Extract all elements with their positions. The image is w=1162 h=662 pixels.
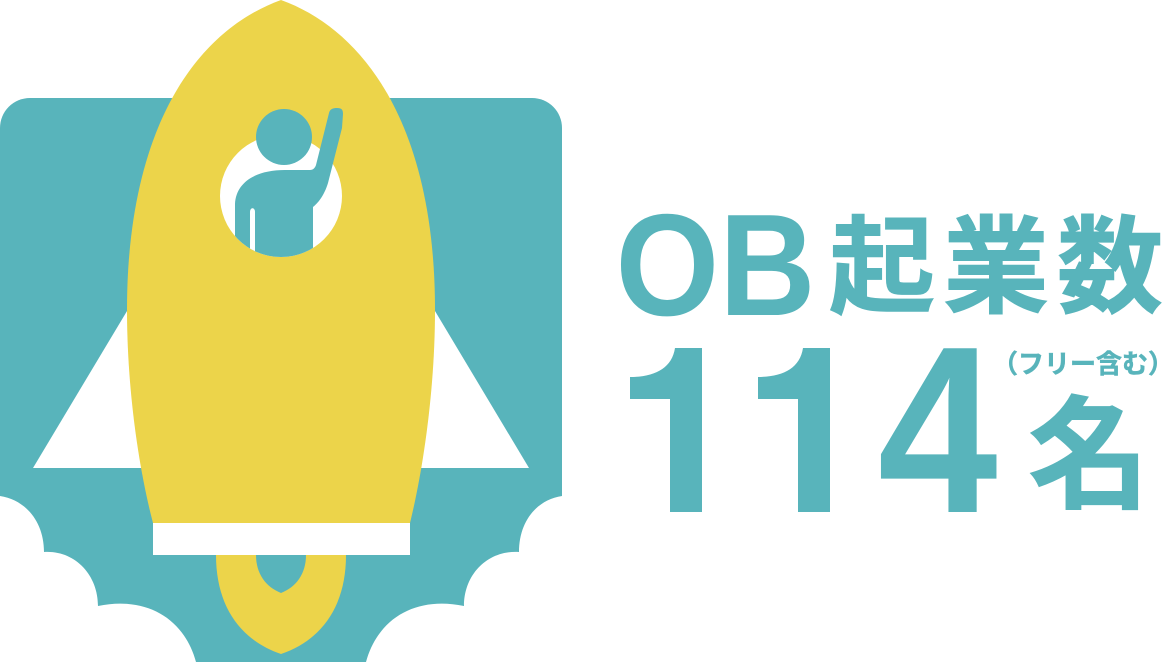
right white fin [412, 306, 529, 468]
heading: OB起業数: OB [616, 184, 816, 346]
icon: person raising arm [235, 108, 343, 262]
rocket body [127, 0, 435, 523]
left white fin [33, 306, 150, 468]
number: 114: 1 [756, 298, 888, 563]
teal rounded background panel [0, 98, 562, 662]
right cloud [366, 496, 562, 662]
flame [216, 555, 346, 654]
number: 114: 4 [878, 297, 998, 563]
left cloud [0, 496, 196, 662]
unit: 名: 名 [1028, 388, 1150, 524]
number: 114: 1 [628, 298, 760, 563]
icon: rocket launch [0, 0, 562, 662]
rocket white base band [153, 523, 410, 555]
heading: OB起業数: 起業数 [829, 210, 1162, 328]
rocket window [220, 135, 342, 257]
flame inner cutout [256, 555, 306, 593]
number: 114 [630, 348, 996, 512]
heading: OB起業数 [616, 184, 1162, 346]
